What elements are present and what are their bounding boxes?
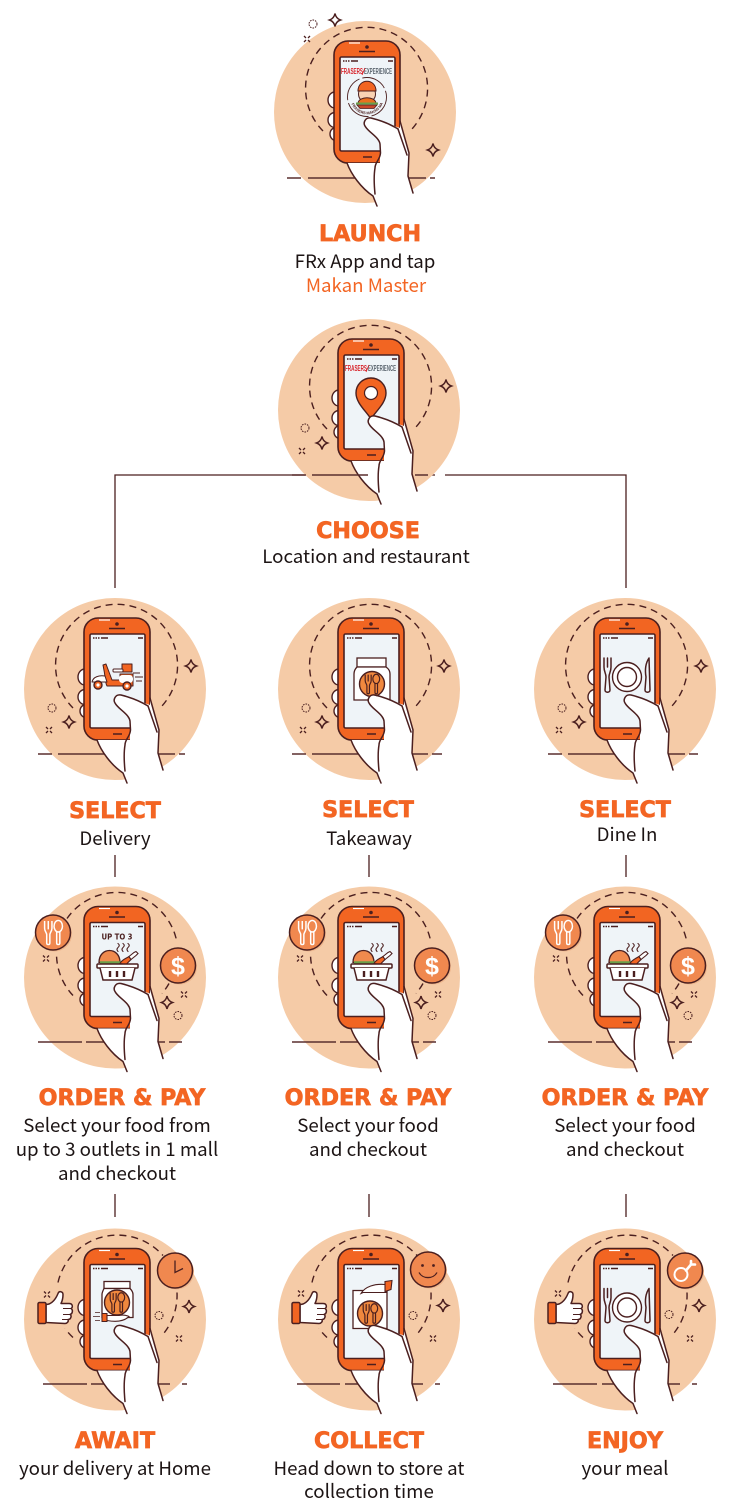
icon: dollar badge: $ bbox=[171, 952, 185, 980]
icon: cutlery badge bbox=[36, 915, 72, 952]
icon: dollar badge: $ bbox=[681, 952, 695, 980]
icon: cutlery badge bbox=[290, 915, 326, 952]
icon: takeaway bag bbox=[354, 658, 390, 700]
icon: smiley badge bbox=[410, 1252, 447, 1288]
app logo: FRASERS bbox=[341, 67, 363, 76]
text: order dine in description: and checkout bbox=[566, 1135, 684, 1162]
icon: thumbs up bbox=[38, 1292, 72, 1324]
icon: bag collected by hand bbox=[353, 1280, 392, 1328]
text: delivery: Delivery bbox=[79, 824, 151, 851]
heading: collect: COLLECT bbox=[314, 1428, 425, 1454]
icon: location pin bbox=[356, 378, 386, 419]
text: enjoy description: your meal bbox=[582, 1454, 668, 1481]
heading: select takeaway: SELECT bbox=[322, 797, 415, 823]
icon: dollar badge: $ bbox=[425, 952, 439, 980]
icon: thumbs up bbox=[548, 1292, 582, 1324]
heading: select dine in: SELECT bbox=[579, 797, 672, 823]
icon: dollar badge bbox=[414, 948, 451, 984]
screen text: up to 3: UP TO 3 bbox=[102, 932, 132, 942]
step: select dine in illustration bbox=[534, 598, 716, 783]
heading: order and pay delivery: ORDER & PAY bbox=[39, 1085, 206, 1111]
step: await illustration bbox=[24, 1228, 206, 1414]
text: order delivery description bbox=[16, 1111, 218, 1186]
heading: enjoy: ENJOY bbox=[587, 1428, 664, 1454]
makan master badge bbox=[347, 77, 387, 117]
text: order dine in description: Select your food bbox=[554, 1111, 696, 1138]
text: order dine in description bbox=[554, 1111, 696, 1162]
text: takeaway: Takeaway bbox=[326, 824, 412, 851]
text: order delivery description: and checkout bbox=[58, 1159, 176, 1186]
step: enjoy illustration bbox=[534, 1228, 716, 1414]
icon: scooter bbox=[92, 664, 143, 690]
text: order takeaway description: and checkout bbox=[309, 1135, 427, 1162]
text: dine in: Dine In bbox=[597, 820, 657, 847]
text: choose description: Location and restaurant bbox=[262, 542, 470, 569]
step: launch illustration bbox=[274, 13, 456, 207]
text: launch description bbox=[295, 247, 435, 298]
heading: order and pay takeaway: ORDER & PAY bbox=[285, 1085, 452, 1111]
heading: await: AWAIT bbox=[75, 1428, 156, 1454]
text: await description: your delivery at Home bbox=[19, 1454, 211, 1481]
icon: food basket bbox=[607, 944, 648, 980]
heading: select delivery: SELECT bbox=[69, 798, 162, 824]
app logo: EXPERIENCE bbox=[364, 67, 392, 76]
step: order dine in illustration bbox=[534, 886, 716, 1072]
icon: dollar badge bbox=[160, 948, 197, 984]
step: collect illustration bbox=[278, 1228, 460, 1414]
icon: cutlery badge bbox=[546, 915, 582, 952]
icon: chicken badge bbox=[668, 1253, 704, 1290]
text: collect description: collection time bbox=[304, 1477, 434, 1504]
text: launch description: Makan Master bbox=[306, 271, 427, 298]
app logo: EXPERIENCE bbox=[368, 364, 396, 373]
step: choose illustration bbox=[278, 319, 460, 504]
icon: takeaway bag handed over bbox=[93, 1282, 133, 1322]
icon: dollar badge bbox=[670, 948, 707, 984]
step: select takeaway illustration bbox=[278, 598, 460, 783]
heading: order and pay dine in: ORDER & PAY bbox=[542, 1085, 709, 1111]
text: collect description: Head down to store at bbox=[274, 1454, 464, 1481]
icon: plate and cutlery bbox=[604, 658, 650, 692]
step: order takeaway illustration bbox=[278, 886, 460, 1072]
heading: choose: CHOOSE bbox=[316, 518, 420, 544]
makan master badge: FRASERS MAKAN MASTER bbox=[352, 102, 383, 114]
text: collect description bbox=[274, 1454, 464, 1504]
text: order delivery description: up to 3 outlets in 1 mall bbox=[16, 1135, 218, 1162]
tree connector lines bbox=[115, 475, 626, 1217]
icon: food basket bbox=[97, 944, 138, 980]
step: select delivery illustration bbox=[24, 598, 206, 783]
text: launch description: FRx App and tap bbox=[295, 247, 435, 274]
icon: thumbs up bbox=[292, 1292, 326, 1324]
heading: launch: LAUNCH bbox=[319, 221, 421, 247]
app logo: FRASERS bbox=[345, 364, 367, 373]
text: order takeaway description bbox=[297, 1111, 439, 1162]
text: order delivery description: Select your food from bbox=[23, 1111, 211, 1138]
icon: clock badge bbox=[158, 1253, 194, 1290]
step: order delivery illustration bbox=[24, 886, 206, 1072]
icon: food basket bbox=[351, 944, 392, 980]
icon: plate and cutlery bbox=[604, 1288, 650, 1323]
text: order takeaway description: Select your food bbox=[297, 1111, 439, 1138]
